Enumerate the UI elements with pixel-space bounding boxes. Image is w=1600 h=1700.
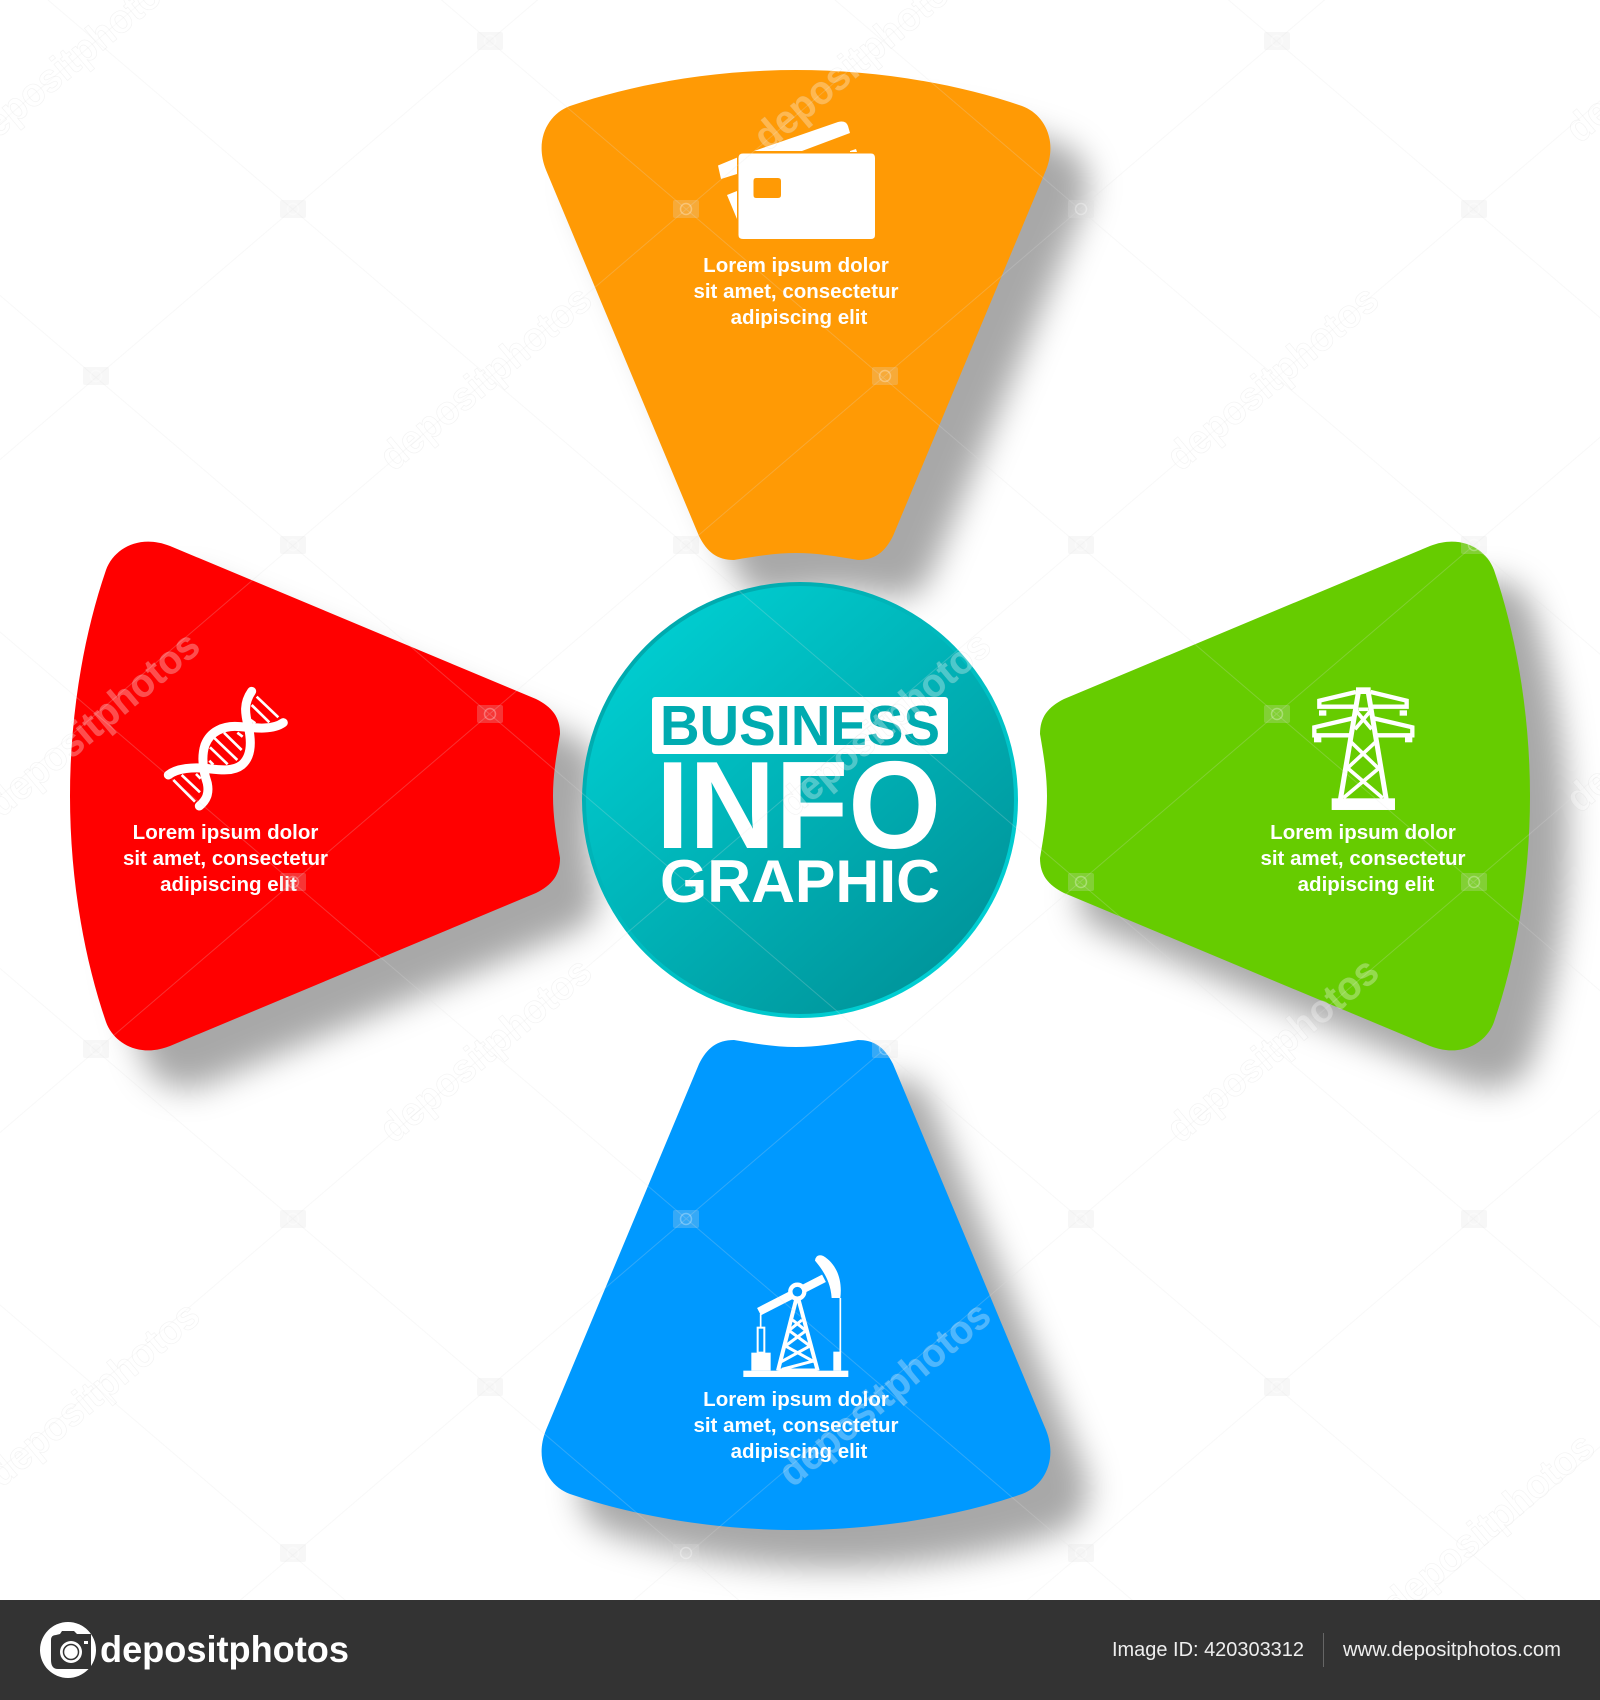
center circle — [582, 582, 1018, 1018]
icon: DNA helix — [168, 691, 283, 806]
text: green panel: Lorem ipsum dolor — [1270, 821, 1456, 844]
title: business info graphic: INFO — [656, 736, 941, 875]
icon: power pylon — [1314, 687, 1412, 810]
text: blue panel: adipiscing elit — [731, 1440, 868, 1463]
text: red panel: adipiscing elit — [160, 873, 297, 896]
logo: depositphotos — [40, 1622, 349, 1678]
footer bar — [0, 1600, 1600, 1700]
text: green panel: sit amet, consectetur — [1260, 847, 1466, 870]
title: business info graphic: BUSINESS — [660, 694, 940, 758]
text: red panel: Lorem ipsum dolor — [133, 821, 318, 844]
image id: Image ID: 420303312 — [1112, 1639, 1304, 1661]
watermark overlay: depositphotos — [371, 949, 600, 1151]
text: green panel: adipiscing elit — [1298, 873, 1435, 896]
watermark overlay: depositphotos — [1158, 949, 1387, 1151]
watermark overlay: depositphotos — [770, 623, 999, 825]
icon: credit cards — [718, 122, 875, 239]
text: blue panel: sit amet, consectetur — [693, 1414, 899, 1437]
watermark overlay: depositphotos — [770, 1293, 999, 1495]
logo: depositphotos: depositphotos — [100, 1629, 349, 1670]
panel shadows — [108, 108, 1568, 1568]
website: www.depositphotos.com — [1342, 1639, 1561, 1661]
text: blue panel — [693, 1388, 899, 1463]
text: red panel — [123, 821, 328, 896]
icon: oil pumpjack — [743, 1255, 848, 1377]
panel: blue bottom — [542, 1040, 1050, 1530]
panel: green right — [1040, 542, 1530, 1050]
text: orange panel: Lorem ipsum dolor — [703, 254, 889, 277]
text: green panel — [1260, 821, 1466, 896]
watermark overlay: depositphotos — [371, 277, 600, 479]
text: orange panel: adipiscing elit — [731, 306, 868, 329]
text: red panel: sit amet, consectetur — [123, 847, 328, 870]
text: orange panel: sit amet, consectetur — [693, 280, 899, 303]
text: orange panel — [693, 254, 899, 329]
panel: red left — [70, 542, 560, 1050]
watermark overlay: depositphotos — [1158, 277, 1387, 479]
title: business info graphic — [652, 694, 948, 915]
text: blue panel: Lorem ipsum dolor — [703, 1388, 889, 1411]
panel: orange top — [542, 70, 1050, 560]
title: business info graphic: GRAPHIC — [660, 848, 940, 915]
